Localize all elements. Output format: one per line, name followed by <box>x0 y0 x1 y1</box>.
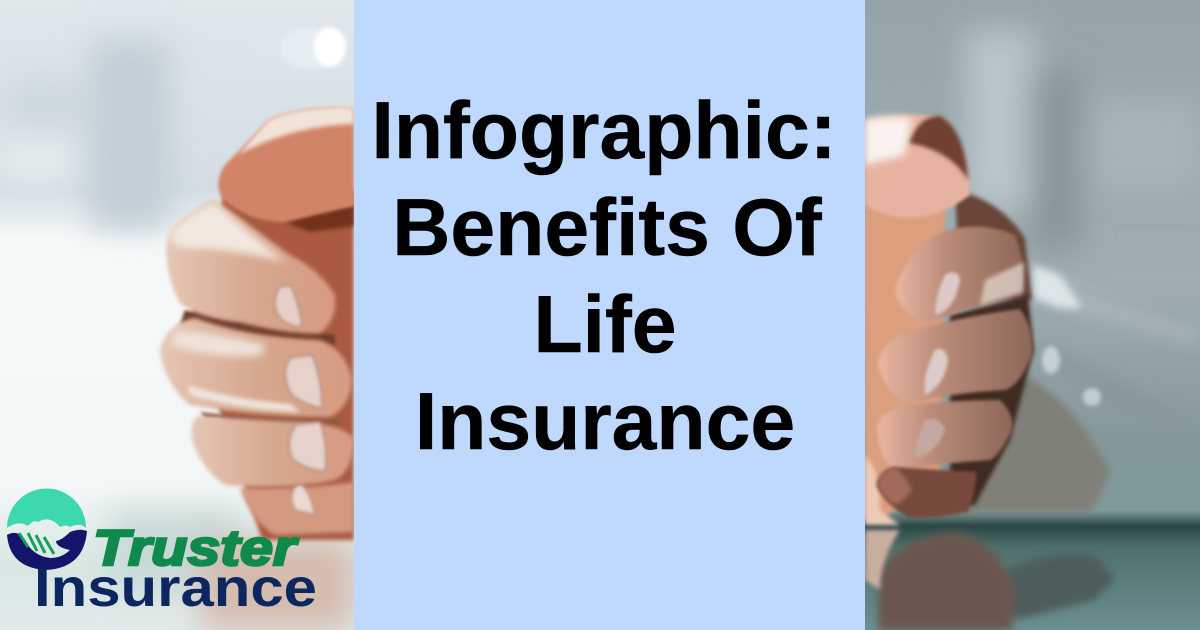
finger 3 nail <box>289 422 326 471</box>
finger 4 nail <box>292 485 314 514</box>
finger 2 <box>878 309 1032 403</box>
finger 1 <box>895 226 1024 323</box>
title: Insurance <box>415 377 795 467</box>
logo wordmark: Truster: Truster <box>93 520 299 576</box>
logo: Truster Insurance <box>7 489 317 618</box>
logo icon: umbrella dome <box>7 489 86 528</box>
finger 2 nail <box>285 355 322 408</box>
palm <box>190 190 354 540</box>
finger 1 nail <box>275 285 302 326</box>
title panel <box>354 0 865 630</box>
hand reflection <box>878 532 1015 630</box>
right photo panel: hand and glass table <box>865 0 1200 630</box>
web dark <box>955 190 1032 300</box>
finger 4 <box>240 482 354 535</box>
knuckle shadow <box>180 310 335 345</box>
title: Benefits Of <box>392 183 822 273</box>
title: Life <box>533 280 677 370</box>
sleeve <box>960 375 1110 512</box>
finger 2 nail <box>924 349 948 395</box>
finger 1 <box>166 200 335 333</box>
logo wordmark: Insurance: Insurance <box>34 558 317 618</box>
finger 3 <box>192 416 354 487</box>
thumb <box>865 115 970 218</box>
finger 4 <box>877 467 977 518</box>
finger 2 <box>160 318 352 417</box>
glass table reflection <box>1007 552 1115 622</box>
logo icon: cupped hand <box>7 530 87 570</box>
title: Infographic: <box>371 86 837 176</box>
finger 1 nail <box>935 272 960 315</box>
left photo panel: hand behind sleeve <box>0 0 354 630</box>
logo icon: green fingers <box>19 533 54 554</box>
knuckle shadow lower <box>200 412 340 426</box>
thumb <box>218 108 354 222</box>
finger 3 nail <box>915 419 945 458</box>
finger 3 <box>877 400 1012 470</box>
palm <box>865 200 945 520</box>
title <box>371 86 837 467</box>
shadow between fingers <box>950 295 1034 505</box>
